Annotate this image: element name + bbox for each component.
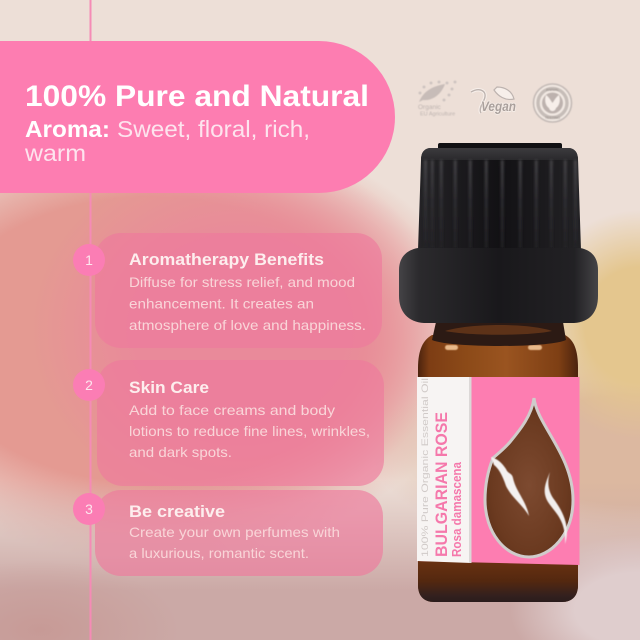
body text: be creative [129,524,340,561]
icon: EU organic leaf: EU Agriculture [420,112,455,118]
aroma text: warm [24,140,86,166]
body text: skin care [129,402,370,460]
panel: aromatherapy benefits [73,233,382,348]
body text: be creative: Create your own perfumes with [129,524,340,540]
body text: skin care: and dark spots. [129,444,232,460]
aroma text: Aroma: [25,116,110,142]
body text: skin care: Add to face creams and body [129,402,335,418]
cap top [438,143,562,151]
number badge 3 [73,493,105,525]
product bottle [399,143,598,602]
icon: vegan [471,87,516,114]
body text: aromatherapy benefits: Diffuse for stress relief, and mood [129,274,355,290]
dropper cap [399,143,598,323]
number badge 2 [73,369,105,401]
number badge 3: 3 [85,501,93,517]
title banner [0,41,395,193]
number badge 1 [73,244,105,276]
body text: aromatherapy benefits: atmosphere of love and happiness. [129,317,366,333]
cap collar [399,248,598,323]
body text: aromatherapy benefits [129,274,366,333]
aroma text [24,116,310,166]
bottle glass body [418,335,578,602]
icon: EU organic leaf [418,80,456,118]
heading: be creative: Be creative [129,502,225,521]
heading: skin care: Skin Care [129,378,209,397]
icon: oil drop logo [485,398,573,557]
icon: vegan: Vegan [481,98,516,114]
title: 100% Pure and Natural [25,80,369,113]
heading: aromatherapy benefits: Aromatherapy Benefits [129,250,324,269]
body text: skin care: lotions to reduce fine lines, wrinkles, [129,423,370,439]
icon: animal testing seal: TESTING [545,116,560,120]
panel: be creative [73,490,383,576]
ribbed cap body [418,148,581,250]
icon: animal testing seal: ANIMAL [546,88,559,92]
label text: rosa damascena: Rosa damascena [450,461,464,557]
label text: essential oil: 100% Pure Organic Essential Oil [420,378,430,557]
vertical timeline line [90,0,92,640]
label text: bulgarian rose: BULGARIAN ROSE [432,412,451,557]
icon: EU organic leaf: Organic [418,104,442,111]
body text: aromatherapy benefits: enhancement. It creates an [129,296,314,312]
bottle neck ring [432,322,566,346]
panel: skin care [73,360,384,486]
aroma text: Sweet, floral, rich, [117,116,310,142]
icon: animal testing seal [534,84,572,122]
body text: be creative: a luxurious, romantic scent. [129,545,309,561]
number badge 2: 2 [85,377,93,393]
number badge 1: 1 [85,252,93,268]
bottle label [417,377,580,565]
